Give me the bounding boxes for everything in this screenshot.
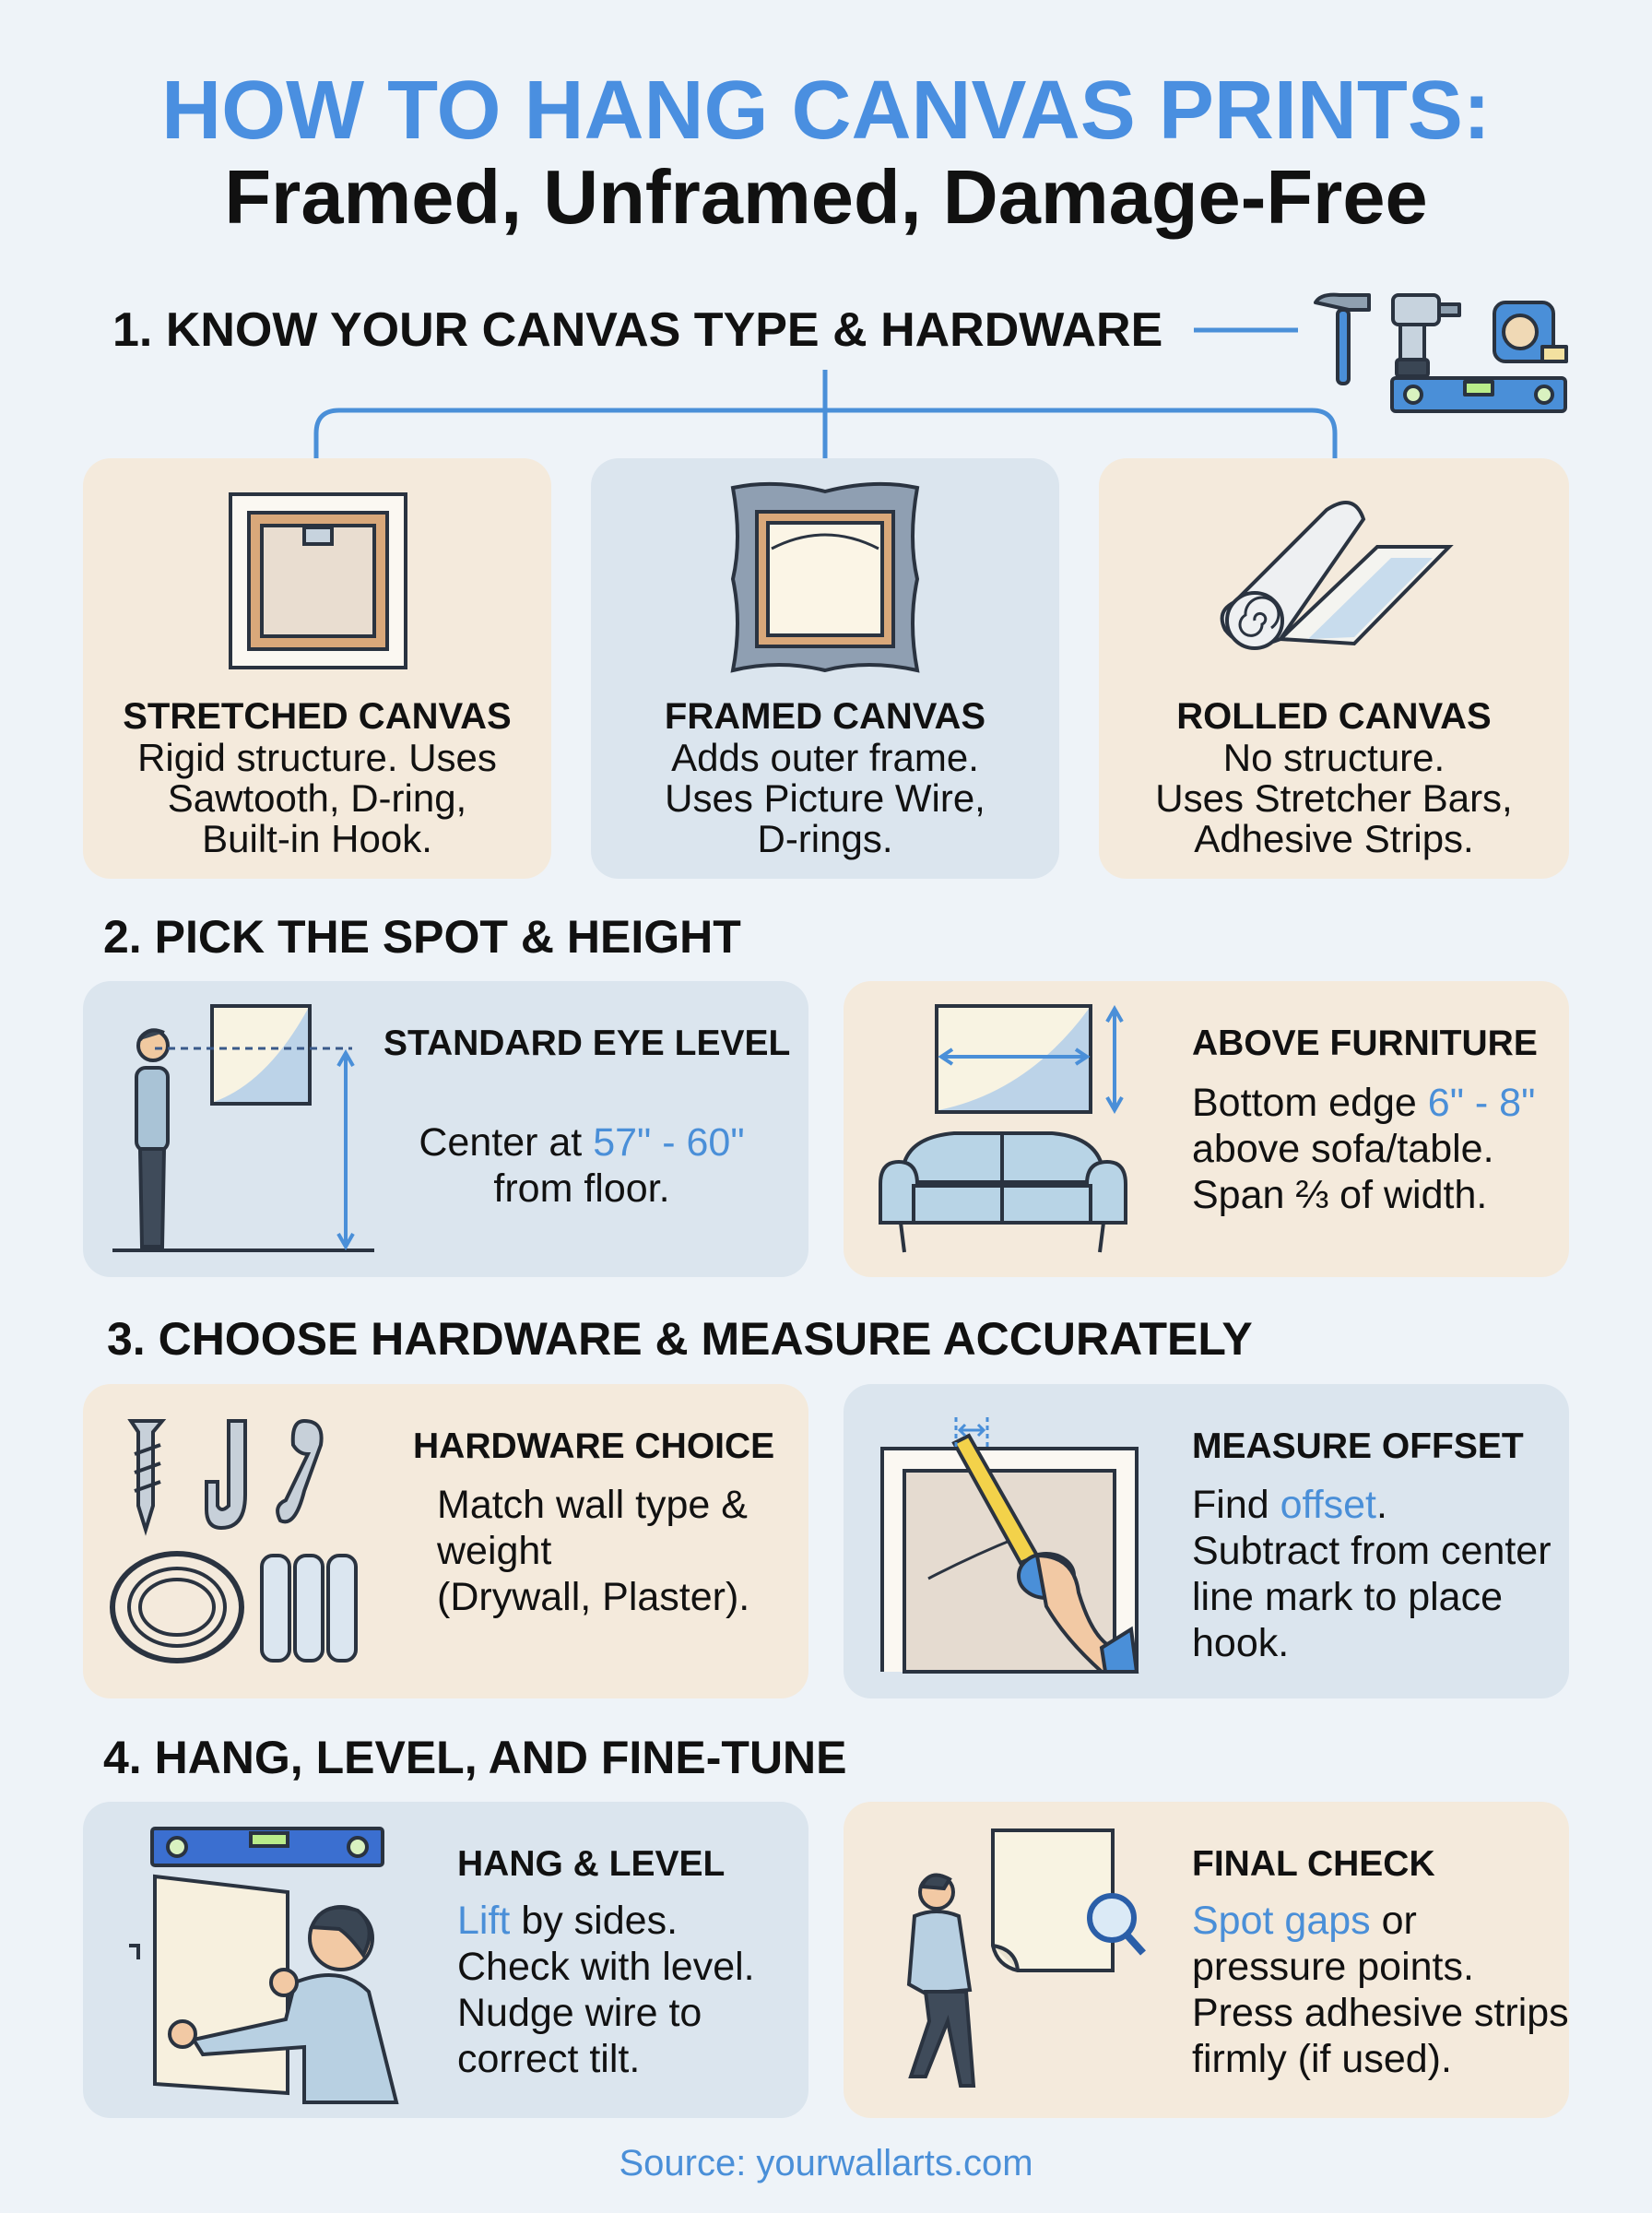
- text: stretched canvas: [123, 696, 512, 860]
- icon: rolled canvas: [1221, 501, 1454, 650]
- text: framed canvas: D-rings.: [757, 817, 893, 860]
- text: rolled canvas: Uses Stretcher Bars,: [1155, 776, 1513, 820]
- title: [161, 65, 1491, 240]
- text: framed canvas: FRAMED CANVAS: [665, 696, 985, 737]
- text: rolled canvas: Adhesive Strips.: [1194, 817, 1474, 860]
- panel: measure offset: hook.: [1192, 1621, 1289, 1665]
- text: rolled canvas: No structure.: [1223, 736, 1445, 779]
- panel: final check: [844, 1802, 1569, 2118]
- text: stretched canvas: Sawtooth, D-ring,: [168, 776, 466, 820]
- text: framed canvas: [665, 696, 985, 860]
- panel: stretched canvas: [83, 458, 551, 879]
- heading 2: 2. PICK THE SPOT & HEIGHT: [103, 911, 741, 963]
- icon: framed canvas: [730, 481, 920, 673]
- panel: rolled canvas: [1099, 458, 1569, 879]
- title: HOW TO HANG CANVAS PRINTS:: [161, 65, 1491, 157]
- panel: measure offset: [844, 1384, 1569, 1698]
- text: hang and level: HANG & LEVEL: [457, 1844, 725, 1884]
- panel: hardware choice: (Drywall, Plaster).: [437, 1575, 749, 1619]
- text: eye level: STANDARD EYE LEVEL: [384, 1024, 790, 1063]
- text: measure offset: MEASURE OFFSET: [1192, 1426, 1524, 1466]
- text: above furniture: ABOVE FURNITURE: [1192, 1024, 1538, 1063]
- heading 4: 4. HANG, LEVEL, AND FINE-TUNE: [103, 1732, 847, 1783]
- panel: standard eye level: Center at 57" - 60": [419, 1120, 745, 1165]
- panel: hang and level: correct tilt.: [457, 2037, 640, 2081]
- panel: final check: Spot gaps or: [1192, 1899, 1417, 1943]
- source footer: Source: yourwallarts.com: [619, 2143, 1033, 2183]
- panel: above furniture: above sofa/table.: [1192, 1127, 1494, 1171]
- panel: hardware choice: weight: [437, 1529, 551, 1573]
- connector lines: [313, 328, 1337, 458]
- panel: above furniture: Bottom edge 6" - 8": [1192, 1081, 1535, 1125]
- heading 3: 3. CHOOSE HARDWARE & MEASURE ACCURATELY: [107, 1313, 1253, 1365]
- heading 1: 1. KNOW YOUR CANVAS TYPE & HARDWARE: [112, 303, 1162, 357]
- panel: final check: pressure points.: [1192, 1945, 1474, 1989]
- panel: final check: firmly (if used).: [1192, 2037, 1452, 2081]
- panel: hang and level: Lift by sides.: [457, 1899, 678, 1943]
- text: stretched canvas: Rigid structure. Uses: [137, 736, 497, 779]
- text: framed canvas: Uses Picture Wire,: [665, 776, 985, 820]
- panel: hang and level: [83, 1802, 808, 2118]
- panel: hardware choice: Match wall type &: [437, 1483, 748, 1527]
- panel: final check: Press adhesive strips: [1192, 1991, 1569, 2035]
- panel: standard eye level: from floor.: [493, 1166, 670, 1211]
- icon: person hanging canvas: [129, 1827, 398, 2104]
- panel: hang and level: Check with level.: [457, 1945, 755, 1989]
- panel: hardware choice: [83, 1384, 808, 1698]
- icon: stretched canvas: [229, 492, 407, 669]
- panel: hang and level: Nudge wire to: [457, 1991, 702, 2035]
- icon: person inspecting: [907, 1828, 1146, 2088]
- text: stretched canvas: Built-in Hook.: [202, 817, 432, 860]
- icon: tools: [1314, 293, 1568, 413]
- icon: sofa diagram: [879, 1004, 1127, 1252]
- panel: measure offset: Find offset.: [1192, 1483, 1387, 1527]
- panel: above furniture: [844, 981, 1569, 1277]
- icon: hardware set: [110, 1419, 358, 1663]
- panel: above furniture: Span ⅔ of width.: [1192, 1173, 1487, 1217]
- text: rolled canvas: [1155, 696, 1513, 860]
- panel: measure offset: line mark to place: [1192, 1575, 1503, 1619]
- panel: framed canvas: [591, 458, 1059, 879]
- text: rolled canvas: ROLLED CANVAS: [1176, 696, 1492, 737]
- text: stretched canvas: STRETCHED CANVAS: [123, 696, 512, 737]
- text: final check: FINAL CHECK: [1192, 1844, 1435, 1884]
- icon: eye level diagram: [112, 1004, 374, 1252]
- icon: measuring tape: [880, 1417, 1139, 1674]
- text: hardware choice: HARDWARE CHOICE: [413, 1426, 774, 1466]
- panel: measure offset: Subtract from center: [1192, 1529, 1552, 1573]
- title: Framed, Unframed, Damage-Free: [224, 154, 1428, 240]
- panel: standard eye level: [83, 981, 808, 1277]
- text: framed canvas: Adds outer frame.: [671, 736, 979, 779]
